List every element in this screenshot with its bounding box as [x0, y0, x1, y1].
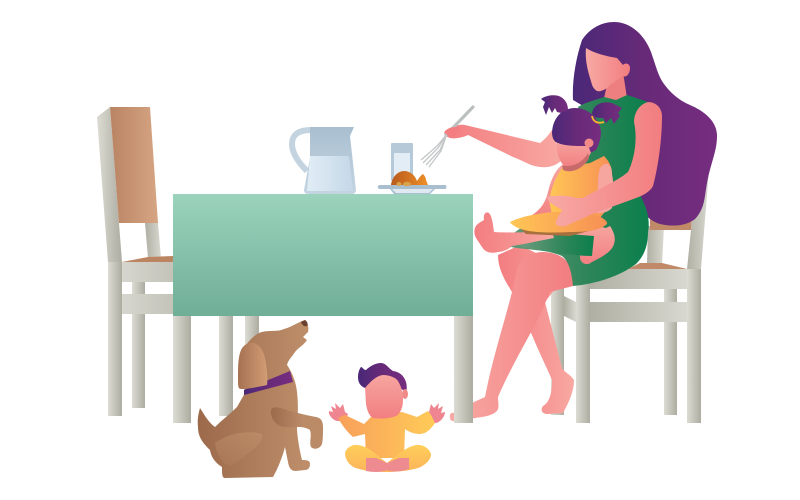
front leg and foot	[450, 252, 573, 421]
chair front right leg	[687, 269, 701, 423]
dog collar	[244, 371, 293, 395]
chair back strut	[647, 226, 664, 265]
girl left pigtail	[541, 95, 568, 115]
dog body	[198, 320, 310, 478]
chair back rear strut	[145, 223, 161, 258]
mother lap green over	[520, 233, 594, 256]
chair seat	[628, 263, 687, 269]
dog ear	[238, 343, 267, 389]
long hair	[573, 22, 717, 226]
baby	[329, 363, 445, 472]
girl near leg	[474, 212, 554, 253]
right chair	[551, 170, 709, 423]
baby right hand	[427, 403, 445, 423]
skirt	[510, 212, 607, 233]
chair seat rail	[122, 262, 173, 282]
food	[391, 171, 428, 185]
chair back panel	[110, 107, 158, 223]
chair back post	[687, 170, 709, 269]
chair lower rail	[590, 302, 687, 322]
baby face	[365, 375, 403, 419]
baby feet	[366, 458, 387, 472]
chair front leg	[108, 262, 122, 416]
dog	[198, 320, 323, 478]
chair seat rail	[590, 269, 687, 289]
jug water	[307, 156, 353, 191]
rear leg	[498, 245, 574, 414]
girl hair	[552, 108, 601, 152]
baby left hand	[329, 403, 348, 421]
tablecloth	[173, 194, 473, 316]
table	[173, 194, 473, 423]
fork handle	[446, 107, 473, 135]
fork head	[421, 134, 447, 167]
girl shoulder	[594, 164, 614, 213]
baby hair	[358, 363, 407, 392]
woman	[444, 22, 717, 421]
jug	[292, 127, 356, 194]
girl legs, skirt and mother's arm	[474, 102, 662, 264]
plate	[378, 185, 446, 194]
chair rear leg	[132, 280, 145, 408]
jug handle	[292, 130, 311, 171]
scrunchie	[592, 116, 604, 123]
fork	[421, 107, 473, 167]
girl face	[557, 140, 592, 167]
girl ear	[584, 138, 594, 148]
girl neck shadow	[562, 153, 589, 171]
woman far arm and girl	[532, 95, 622, 222]
arm with fork	[444, 125, 562, 167]
baby crossed legs	[345, 445, 431, 472]
baby torso and arms	[338, 411, 435, 458]
chair back post	[97, 107, 122, 262]
chair back panel strip	[650, 215, 692, 230]
chair front left leg	[576, 283, 590, 423]
neck	[604, 72, 627, 102]
chair rear right leg	[664, 285, 677, 415]
plate of food	[378, 171, 446, 194]
glass of water	[391, 143, 413, 181]
skirt shadow	[520, 228, 600, 236]
table legs back	[173, 316, 259, 423]
chair lower rail	[122, 294, 173, 314]
hand over fork	[445, 127, 460, 137]
mother arm around girl	[547, 102, 662, 226]
dog back foot	[250, 461, 277, 476]
chair rear left leg	[551, 280, 564, 415]
girl left arm	[532, 165, 570, 222]
girl right pigtail	[592, 102, 622, 124]
dress	[497, 95, 649, 286]
face shape	[586, 48, 630, 91]
chair seat	[122, 256, 173, 262]
dog raised paw	[271, 407, 323, 449]
dog haunch	[215, 432, 262, 466]
chair side rail	[564, 296, 576, 322]
dog nose	[301, 320, 308, 326]
table front right leg	[454, 316, 473, 423]
baby ear	[402, 389, 408, 399]
girl far leg	[570, 226, 615, 264]
girl dress top	[549, 156, 612, 218]
jug body	[304, 127, 356, 194]
left chair	[97, 107, 173, 416]
